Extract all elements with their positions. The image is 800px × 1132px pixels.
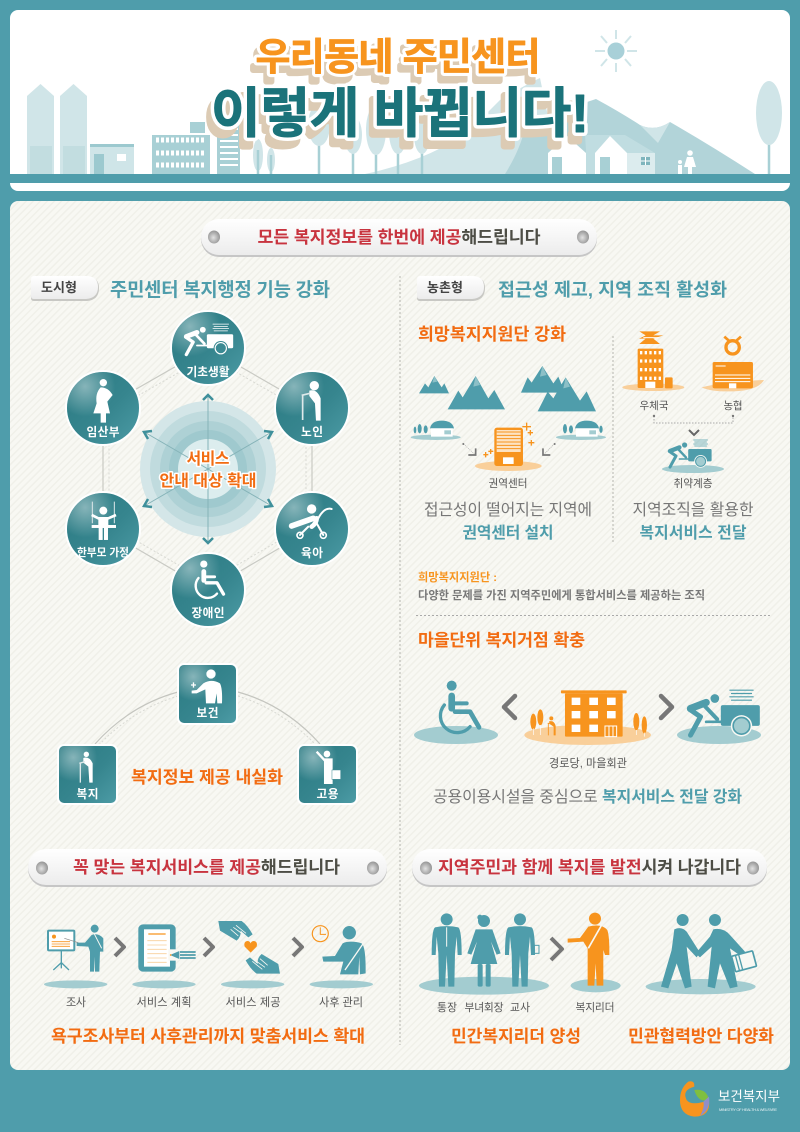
panel: header banner <box>10 10 790 191</box>
subheading: village base: 마을단위 복지거점 확충 <box>418 630 585 650</box>
title line 1: 우리동네 주민센터 <box>256 37 540 79</box>
center text: 서비스 <box>186 450 230 468</box>
arrow right <box>661 696 672 718</box>
node: disabled <box>171 553 245 627</box>
text: tailored service caption: 욕구조사부터 사후관리까지 맞춤서비스 확대 <box>51 1026 365 1046</box>
illustration: mountains and regional center <box>411 366 606 490</box>
text: regional center caption: 접근성이 떨어지는 지역에 <box>424 501 592 519</box>
mountains <box>419 366 596 411</box>
node: childcare: 육아 <box>301 547 323 560</box>
title line 1: 우리동네 주민센터 <box>252 45 536 87</box>
node: health: 보건 <box>196 706 218 720</box>
labels: 통장 <box>437 1001 457 1014</box>
labels <box>437 1001 614 1014</box>
arrow <box>115 938 124 956</box>
illustration: private welfare leaders <box>419 913 757 1014</box>
step: survey <box>44 925 107 988</box>
text: local organization caption: 복지서비스 전달 <box>640 524 747 542</box>
step: plan <box>132 924 196 988</box>
center text: 안내 대상 확대 <box>160 472 256 490</box>
labels: 우체국 <box>640 400 669 412</box>
icon: handshake <box>646 914 757 994</box>
node: disabled: 장애인 <box>192 607 224 620</box>
step: delivery <box>218 921 284 988</box>
labels: 복지리더 <box>576 1001 614 1014</box>
title line 2: 이렇게 바뀝니다! <box>211 84 589 144</box>
title line 2: 이렇게 바뀝니다! <box>206 93 584 153</box>
dotted column divider <box>399 276 401 1045</box>
concentric circles <box>140 401 276 537</box>
node: health <box>178 664 237 724</box>
arrows to targets <box>144 395 272 543</box>
text: regional center caption: 권역센터 설치 <box>462 524 554 542</box>
tab: rural type: 농촌형 <box>427 280 463 295</box>
process: tailored service steps <box>44 921 373 1009</box>
banner: tailored service pill <box>28 849 387 887</box>
icon: residents <box>419 913 549 995</box>
regional center building <box>475 423 542 471</box>
center text: 안내 대상 확대 <box>160 472 256 490</box>
subheading: hope welfare team: 희망복지지원단 강화 <box>418 324 566 344</box>
node: employment: 고용 <box>316 788 339 801</box>
node: single parent <box>66 492 140 566</box>
illustration: post office and nonghyup: 농협 <box>724 399 742 412</box>
post office <box>622 331 684 391</box>
text: definition note: 다양한 문제를 가진 지역주민에게 통합서비스를 제공하는 조직 <box>418 588 705 602</box>
label: welfare info: 복지정보 제공 내실화 <box>131 767 283 787</box>
node: elderly: 노인 <box>301 426 323 439</box>
nonghyup <box>702 337 764 391</box>
node: welfare <box>58 745 117 804</box>
arrow <box>551 938 562 960</box>
logo: ministry of health and welfare: 보건복지부 <box>718 1089 780 1104</box>
text: definition note: 희망복지지원단 : <box>418 570 497 584</box>
node: single parent: 한부모 가정 <box>77 546 129 559</box>
text: local organization caption: 지역조직을 활용한 <box>632 501 754 519</box>
labels: 교사 <box>510 1001 530 1014</box>
step labels: 사후 관리 <box>319 996 363 1009</box>
labels: 부녀회장 <box>464 1001 504 1014</box>
node: employment <box>298 745 357 804</box>
step labels: 조사 <box>66 996 86 1009</box>
logo: ministry of health and welfare <box>680 1081 780 1117</box>
heading: city type: 주민센터 복지행정 기능 강화 <box>110 279 330 300</box>
label: 경로당, 마을회관 <box>549 757 627 770</box>
banner: top heading pill <box>201 219 597 257</box>
tab: city type <box>31 276 99 301</box>
icon: wheelchair user <box>414 681 498 744</box>
arrow left <box>504 696 515 718</box>
chart: service target hexagon <box>66 311 349 627</box>
sun <box>595 30 637 72</box>
tab: rural type <box>417 276 485 301</box>
center text <box>160 450 256 490</box>
node: welfare: 복지 <box>76 788 98 801</box>
node: basic living: 기초생활 <box>186 365 230 379</box>
title line 1: 우리동네 주민센터 <box>256 37 540 79</box>
icon: community building <box>524 690 651 745</box>
connector <box>653 415 734 435</box>
node: elderly <box>275 371 349 445</box>
node: basic living <box>171 311 245 385</box>
banner: top heading pill: 모든 복지정보를 한번에 제공해드립니다 <box>258 227 541 247</box>
tab: city type: 도시형 <box>41 280 77 295</box>
arrow <box>204 938 213 956</box>
text: definition note <box>418 570 705 602</box>
heading: rural type: 접근성 제고, 지역 조직 활성화 <box>498 279 727 300</box>
illustration: village base <box>414 681 761 770</box>
title line 2: 이렇게 바뀝니다! <box>211 84 589 144</box>
label: regional center: 권역센터 <box>488 478 528 490</box>
node: childcare <box>275 492 349 566</box>
banner: tailored service pill: 꼭 맞는 복지서비스를 제공해드립니다 <box>73 857 340 877</box>
center text: 서비스 <box>186 450 230 468</box>
text: cooperation caption: 민관협력방안 다양화 <box>628 1026 774 1046</box>
city skyline illustration <box>27 78 782 174</box>
node: pregnant: 임산부 <box>86 425 120 439</box>
step labels: 서비스 제공 <box>226 996 280 1009</box>
step labels <box>66 996 363 1009</box>
step labels: 서비스 계획 <box>136 996 192 1009</box>
text: leader caption: 민간복지리더 양성 <box>451 1027 581 1046</box>
text: local organization caption <box>632 501 754 542</box>
house left <box>411 421 461 440</box>
logo: ministry of health and welfare: MINISTRY OF HEALTH & WELFARE <box>719 1107 777 1112</box>
panel: main content <box>10 201 790 1070</box>
icon: cart <box>677 690 761 744</box>
house right <box>556 421 606 440</box>
logo mark <box>680 1081 709 1117</box>
illustration: post office and nonghyup <box>622 331 764 490</box>
arrows to center <box>462 443 556 455</box>
inner dotted divider <box>612 336 614 542</box>
text: village caption: 공용이용시설을 중심으로 복지서비스 전달 강화 <box>433 788 742 806</box>
icon: welfare leader <box>568 913 621 992</box>
step: follow-up <box>310 926 373 988</box>
banner: community pill: 지역주민과 함께 복지를 발전시켜 나갑니다 <box>438 857 741 877</box>
illustration: post office and nonghyup: 취약계층 <box>674 478 713 490</box>
arrow <box>293 938 302 956</box>
chart: welfare info triangle <box>58 664 357 804</box>
icon: vulnerable group <box>662 440 724 473</box>
node: pregnant <box>66 371 140 445</box>
banner: community pill <box>412 849 767 887</box>
dotted horizontal divider <box>416 614 770 616</box>
text: regional center caption <box>424 501 592 542</box>
